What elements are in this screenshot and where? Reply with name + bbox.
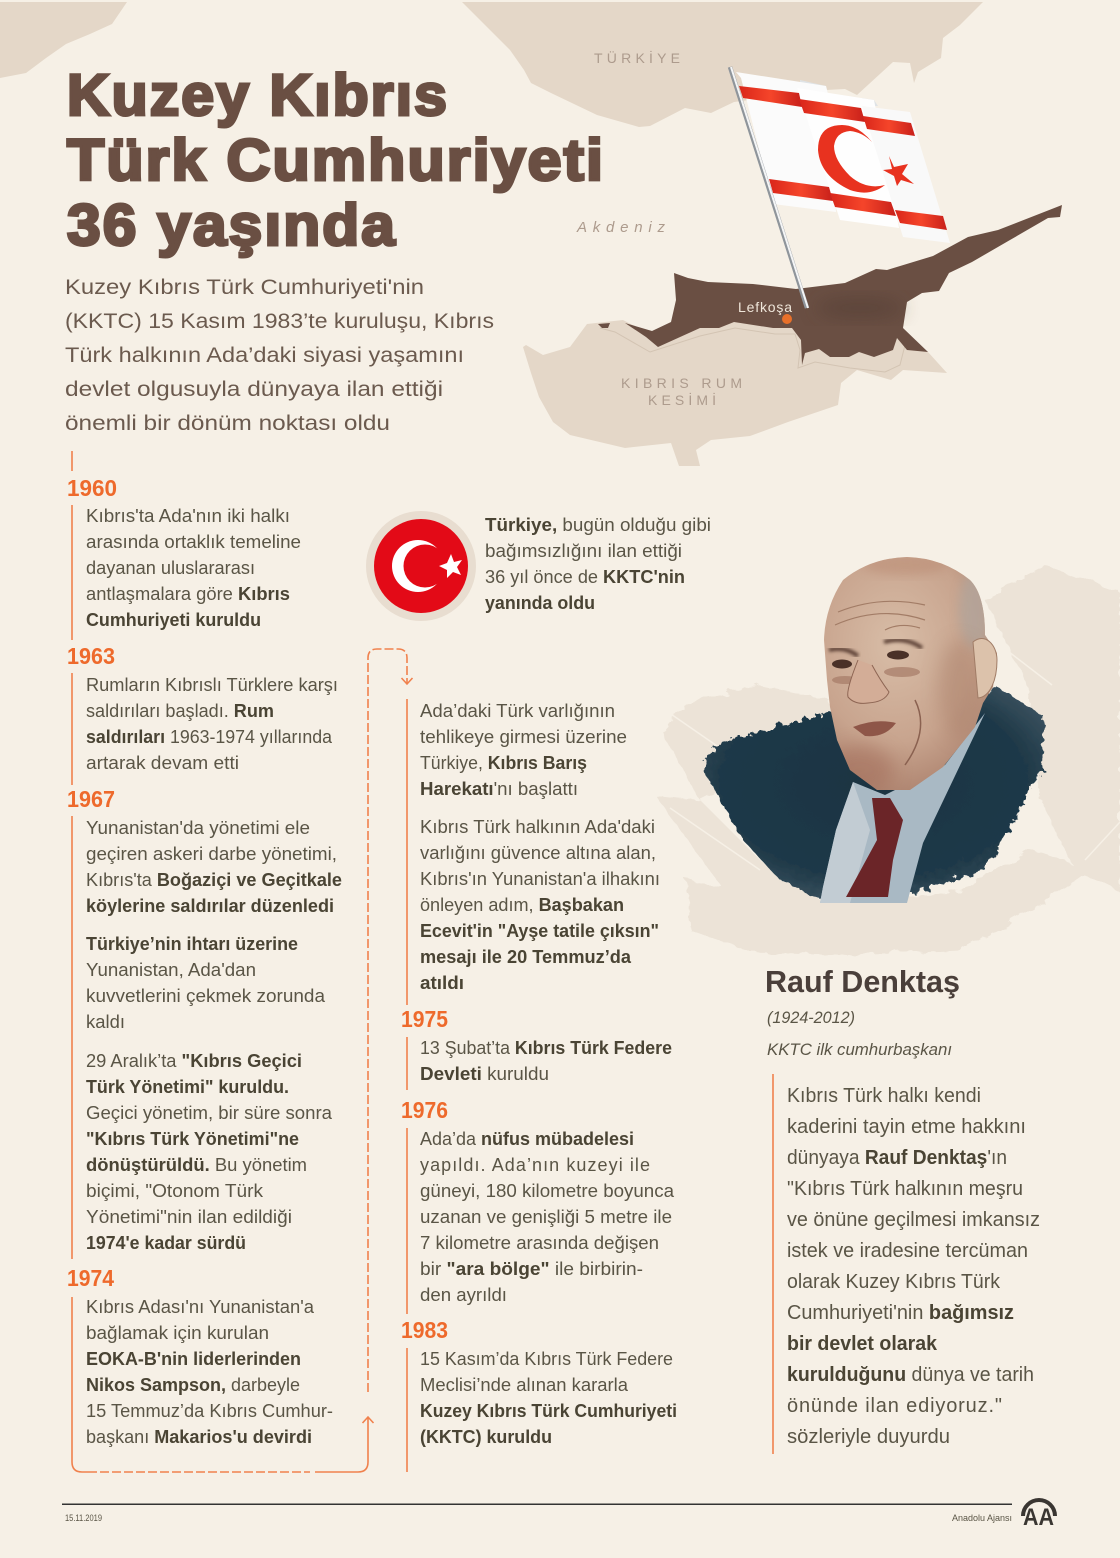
- quote text: Kıbrıs Türk halkı kendi: [787, 1085, 981, 1107]
- timeline entry: 1967: köylerine saldırılar düzenledi: [86, 896, 334, 916]
- timeline entry: 1974: Ada’daki Türk varlığının: [420, 701, 615, 721]
- timeline entry: 1967: Türkiye’nin ihtarı üzerine: [86, 934, 298, 954]
- intro text: [65, 276, 494, 435]
- timeline entry: 1967: kaldı: [86, 1012, 125, 1032]
- timeline entry: 1967: "Kıbrıs Türk Yönetimi"ne: [86, 1129, 299, 1149]
- timeline entry: 1974: EOKA-B'nin liderlerinden: [86, 1349, 301, 1369]
- quote text: dünyaya Rauf Denktaş'ın: [787, 1147, 1007, 1169]
- timeline entry: 1974: [67, 701, 660, 1447]
- map label: Türkiye: TÜRKİYE: [594, 49, 680, 66]
- timeline entry: 1974: başkanı Makarios'u devirdi: [86, 1427, 312, 1447]
- timeline entry: 1983: Meclisi’nde alınan kararla: [420, 1375, 629, 1395]
- quote text: ve önüne geçilmesi imkansız: [787, 1209, 1040, 1231]
- timeline entry: 1974: Kıbrıs Türk halkının Ada'daki: [420, 817, 655, 837]
- timeline entry: 1983: Kuzey Kıbrıs Türk Cumhuriyeti: [420, 1401, 677, 1421]
- map label: Akdeniz: Akdeniz: [576, 219, 666, 236]
- quote text: olarak Kuzey Kıbrıs Türk: [787, 1271, 1001, 1293]
- quote text: "Kıbrıs Türk halkının meşru: [787, 1178, 1023, 1200]
- footer date: 15.11.2019: [65, 1513, 102, 1523]
- quote text: istek ve iradesine tercüman: [787, 1240, 1028, 1262]
- intro text: önemli bir dönüm noktası oldu: [65, 412, 390, 435]
- timeline entry: 1974: Türkiye, Kıbrıs Barış: [420, 753, 587, 773]
- timeline entry: 1963: Rumların Kıbrıslı Türklere karşı: [86, 675, 338, 695]
- map: Türkiye landmass: [462, 2, 983, 127]
- timeline entry: 1974: atıldı: [420, 973, 464, 993]
- timeline entry: 1975: Devleti kuruldu: [420, 1064, 549, 1084]
- timeline entry: 1967: 29 Aralık’ta "Kıbrıs Geçici: [86, 1051, 302, 1071]
- callout: Türkiye support: [485, 515, 711, 613]
- timeline entry: 1983: (KKTC) kuruldu: [420, 1427, 552, 1447]
- timeline entry: 1960: Cumhuriyeti kuruldu: [86, 610, 261, 630]
- callout: Türkiye support: bağımsızlığını ilan ettiği: [485, 541, 682, 561]
- quote text: kurulduğunu dünya ve tarih: [787, 1364, 1034, 1386]
- intro text: (KKTC) 15 Kasım 1983’te kuruluşu, Kıbrıs: [65, 310, 494, 333]
- timeline entry: 1974: önleyen adım, Başbakan: [420, 895, 624, 915]
- intro text: Kuzey Kıbrıs Türk Cumhuriyeti'nin: [65, 276, 424, 299]
- quote text: [787, 1085, 1040, 1448]
- timeline entry: 1975: 13 Şubat’ta Kıbrıs Türk Federe: [420, 1038, 672, 1058]
- map: north Cyprus: [598, 205, 1062, 365]
- footer credit: Anadolu Ajansı: [952, 1513, 1012, 1523]
- timeline entry: 1974: Harekatı'nı başlattı: [420, 779, 578, 799]
- map: south Cyprus: [523, 316, 947, 466]
- map marker: Lefkoşa: Lefkoşa: [738, 299, 792, 315]
- timeline entry: 1967: Geçici yönetim, bir süre sonra: [86, 1103, 333, 1123]
- timeline entry: 1967: 1974'e kadar sürdü: [86, 1233, 246, 1253]
- timeline entry: 1967: geçiren askeri darbe yönetimi,: [86, 844, 337, 864]
- map label: Kıbrıs Rum Kesimi: KIBRIS RUM: [621, 375, 742, 391]
- timeline entry: 1974: tehlikeye girmesi üzerine: [420, 727, 627, 747]
- timeline entry: 1960: Kıbrıs'ta Ada'nın iki halkı: [86, 506, 290, 526]
- timeline entry: 1974: Kıbrıs'ın Yunanistan'a ilhakını: [420, 869, 660, 889]
- callout: Türkiye support: Türkiye, bugün olduğu gibi: [485, 515, 711, 535]
- timeline entry: 1976: den ayrıldı: [420, 1285, 507, 1305]
- icon: Anadolu Ajansı logo: AA: [1023, 1504, 1054, 1531]
- footer rule: [62, 1504, 1012, 1505]
- timeline entry: 1960: 1960: [67, 475, 117, 501]
- timeline entry: 1974: mesajı ile 20 Temmuz’da: [420, 947, 632, 967]
- timeline entry: 1967: Yönetimi"nin ilan edildiği: [86, 1207, 292, 1227]
- quote text: önünde ilan ediyoruz.": [787, 1395, 1002, 1417]
- timeline entry: 1976: 7 kilometre arasında değişen: [420, 1233, 659, 1253]
- portrait caption: years and title: [767, 1008, 952, 1059]
- timeline entry: 1967: Yunanistan'da yönetimi ele: [86, 818, 310, 838]
- timeline entry: 1975: [401, 1006, 672, 1084]
- timeline entry: 1974: varlığını güvence altına alan,: [420, 843, 656, 863]
- timeline entry: 1967: Kıbrıs'ta Boğaziçi ve Geçitkale: [86, 870, 342, 890]
- timeline entry: 1960: dayanan uluslararası: [86, 558, 255, 578]
- timeline entry: 1976: yapıldı. Ada’nın kuzeyi ile: [420, 1155, 650, 1175]
- timeline entry: 1983: 1983: [401, 1317, 448, 1343]
- timeline entry: 1963: [67, 643, 338, 773]
- timeline entry: 1976: uzanan ve genişliği 5 metre ile: [420, 1207, 672, 1227]
- title: 36 yaşında: [67, 193, 397, 258]
- title: Türk Cumhuriyeti: [67, 128, 605, 193]
- callout: Türkiye support: yanında oldu: [485, 593, 595, 613]
- callout: Türkiye support: 36 yıl önce de KKTC'nin: [485, 567, 685, 587]
- title: [67, 63, 605, 258]
- timeline entry: 1974: Ecevit'in "Ayşe tatile çıksın": [420, 921, 659, 941]
- timeline connector: left column: [72, 451, 412, 1472]
- timeline entry: 1963: artarak devam etti: [86, 753, 239, 773]
- timeline entry: 1960: arasında ortaklık temeline: [86, 532, 301, 552]
- timeline entry: 1975: 1975: [401, 1006, 448, 1032]
- timeline entry: 1974: 1974: [67, 1265, 114, 1291]
- portrait: Rauf Denktaş: [703, 550, 1045, 903]
- timeline entry: 1983: [401, 1317, 677, 1447]
- portrait caption: years and title: (1924-2012): [767, 1008, 855, 1027]
- timeline entry: 1963: 1963: [67, 643, 115, 669]
- timeline entry: 1963: saldırıları 1963-1974 yıllarında: [86, 727, 333, 747]
- icon: Turkish flag badge: [366, 511, 476, 621]
- map: south Cyprus contour: [600, 328, 905, 372]
- quote text: bir devlet olarak: [787, 1333, 938, 1355]
- timeline entry: 1974: Kıbrıs Adası'nı Yunanistan'a: [86, 1297, 315, 1317]
- portrait caption: name: Rauf Denktaş: [765, 964, 960, 999]
- map label: Kıbrıs Rum Kesimi: [621, 375, 742, 408]
- timeline entry: 1976: bir "ara bölge" ile birbirin-: [420, 1259, 643, 1279]
- timeline entry: 1976: güneyi, 180 kilometre boyunca: [420, 1181, 675, 1201]
- timeline entry: 1976: Ada’da nüfus mübadelesi: [420, 1129, 634, 1149]
- title: Kuzey Kıbrıs: [67, 63, 449, 128]
- quote text: kaderini tayin etme hakkını: [787, 1116, 1026, 1138]
- icon: KKTC flag on pole: [730, 67, 950, 308]
- timeline entry: 1967: Türk Yönetimi" kuruldu.: [86, 1077, 289, 1097]
- timeline entry: 1963: saldırıları başladı. Rum: [86, 701, 274, 721]
- quote text: sözleriyle duyurdu: [787, 1426, 950, 1448]
- timeline entry: 1960: [67, 475, 301, 630]
- timeline entry: 1967: biçimi, "Otonom Türk: [86, 1181, 264, 1201]
- timeline entry: 1960: antlaşmalara göre Kıbrıs: [86, 584, 290, 604]
- timeline entry: 1976: [401, 1097, 675, 1305]
- quote rule: [772, 1074, 774, 1454]
- timeline entry: 1967: dönüştürüldü. Bu yönetim: [86, 1155, 307, 1175]
- timeline entry: 1983: 15 Kasım’da Kıbrıs Türk Federe: [420, 1349, 673, 1369]
- quote text: Cumhuriyeti'nin bağımsız: [787, 1302, 1014, 1324]
- map marker: Lefkoşa: [738, 299, 792, 324]
- map label: Kıbrıs Rum Kesimi: KESİMİ: [648, 391, 716, 408]
- timeline entry: 1974: bağlamak için kurulan: [86, 1323, 269, 1343]
- timeline entry: 1967: [67, 786, 342, 1253]
- map: land top left: [0, 2, 127, 78]
- timeline entry: 1967: 1967: [67, 786, 115, 812]
- portrait caption: years and title: KKTC ilk cumhurbaşkanı: [767, 1040, 952, 1059]
- timeline entry: 1974: 15 Temmuz’da Kıbrıs Cumhur-: [86, 1401, 333, 1421]
- intro text: devlet olgusuyla dünyaya ilan ettiği: [65, 378, 443, 401]
- intro text: Türk halkının Ada’daki siyasi yaşamını: [65, 344, 464, 367]
- timeline entry: 1967: Yunanistan, Ada'dan: [86, 960, 256, 980]
- portrait background: brush strokes: [655, 566, 1120, 955]
- timeline connector: right column: [406, 699, 408, 1472]
- timeline entry: 1976: 1976: [401, 1097, 448, 1123]
- timeline entry: 1967: kuvvetlerini çekmek zorunda: [86, 986, 326, 1006]
- timeline entry: 1974: Nikos Sampson, darbeyle: [86, 1375, 300, 1395]
